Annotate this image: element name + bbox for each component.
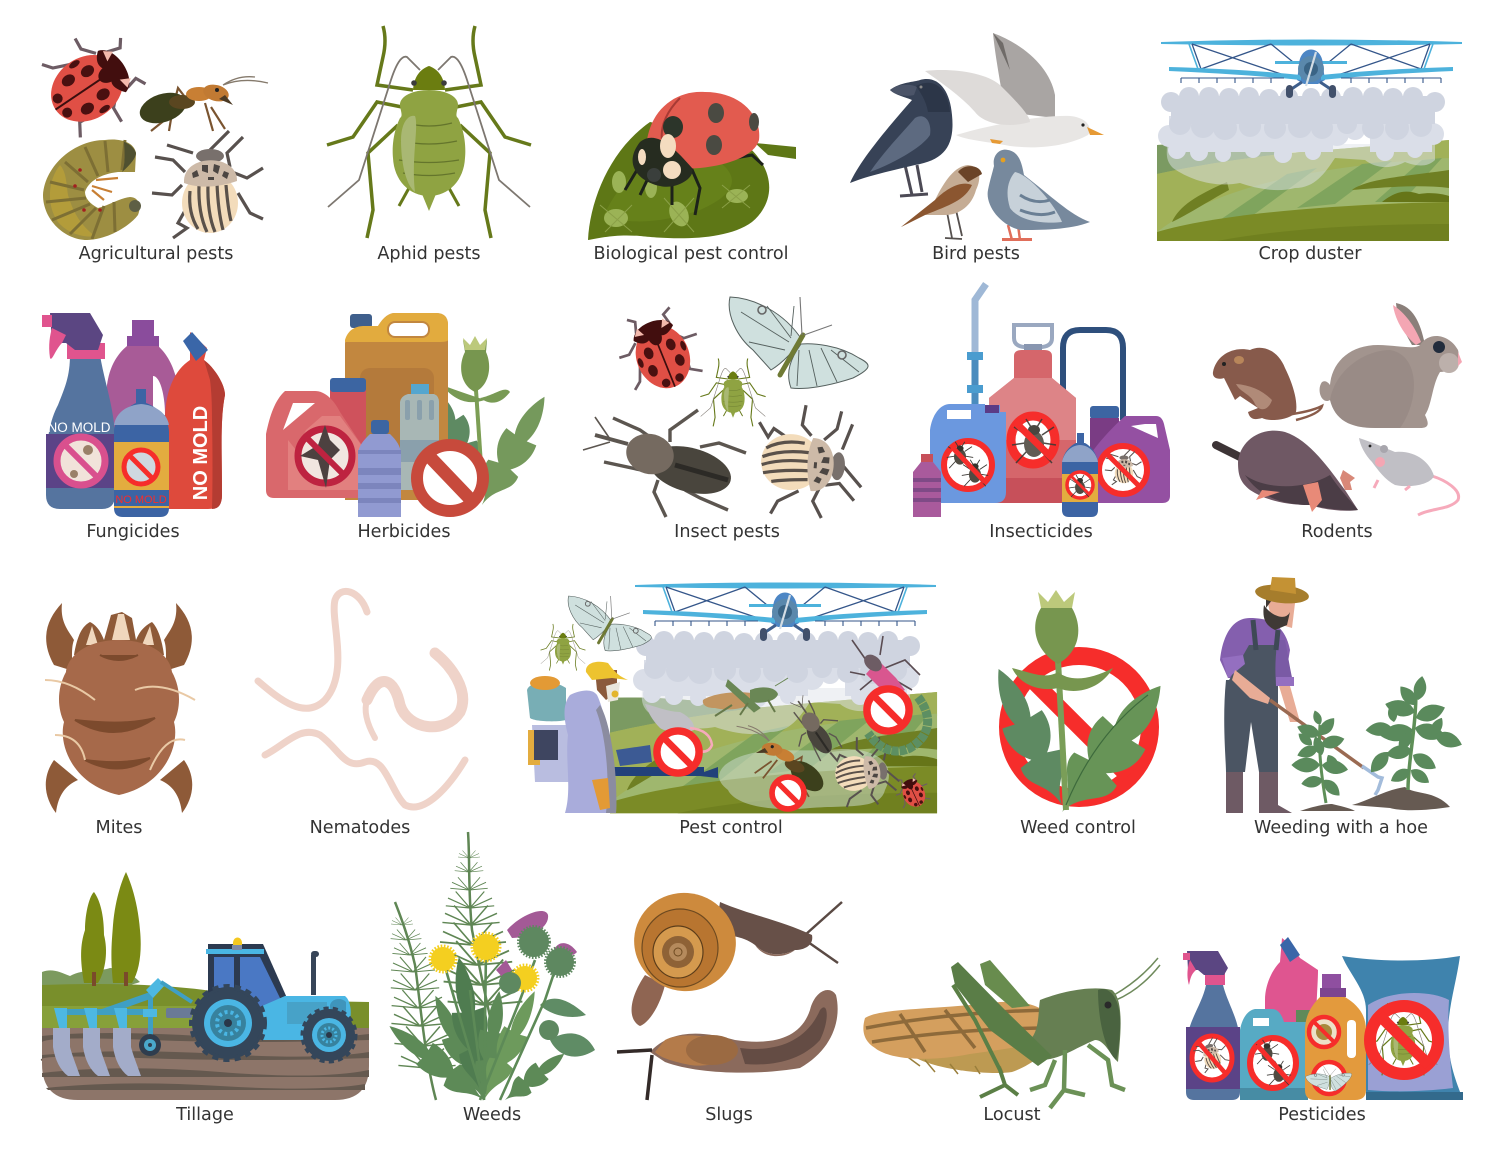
icon: horsetail stems [391,832,522,1100]
icon: blue jug [930,404,1006,503]
icon: yellow flowers [431,934,537,990]
icon: mole [1216,431,1358,512]
icon: purple jug [1090,406,1170,503]
icon: crow [850,79,953,196]
icon: blue spray bottle [1183,951,1240,1100]
panel: Tillage [41,872,369,1125]
icon: red bottle: NO MOLD [190,406,212,500]
illustration: soil [41,1028,369,1100]
icon: ladybug on leaf [625,92,763,215]
icon: biplane [635,582,936,641]
icon: pink beetle [850,636,920,692]
icon: pink bottle [1265,937,1318,1040]
caption: Herbicides [357,522,451,542]
caption: Nematodes [310,818,410,838]
caption: Agricultural pests [79,244,233,264]
caption: Crop duster [1258,244,1362,264]
icon: thistles [496,911,577,1040]
panel: Weeds [381,832,595,1125]
icon: rabbit [1320,303,1462,428]
caption: Mites [96,818,142,838]
illustration: spray cloud [633,631,920,734]
icon: purple bottle [106,320,181,500]
panel: Mites [45,603,195,838]
icon: orange jug [345,313,448,500]
panel: Slugs [617,881,842,1125]
icon: blue-purple bottle [358,420,401,517]
icon: prohibition sign [417,445,483,511]
icon: spray bottle: NO MOLD [47,420,111,435]
panel: Herbicides [266,313,560,542]
icon: moth [568,596,651,651]
icon: sparrow [901,165,982,239]
icon: leaves [381,950,595,1111]
panel: Insect pests [583,297,868,542]
icon: mouse [1359,438,1459,515]
caption: Slugs [705,1105,753,1125]
icon: spray bottle [42,313,115,509]
icon: hoe [1270,700,1382,795]
icon: plough [53,978,192,1076]
icon: worms [258,591,465,807]
icon: biplane [1161,40,1462,98]
illustration: field [610,692,937,813]
icon: sprayer tube [967,284,986,410]
icon: small aerosol bottle [1062,433,1098,517]
icon: soil mounds [1300,787,1450,811]
icon: farmer [1220,577,1310,813]
panel: Insecticides [913,284,1170,542]
icon: ladybug [607,298,712,402]
icon: red bottle [165,332,225,509]
icon: small bottle [114,389,169,517]
illustration: landscape [42,872,369,1030]
icon: tractor [192,938,355,1061]
icon: red canister [989,325,1076,503]
icon: teal jug [1240,1009,1310,1100]
panel: Agricultural pests [29,17,268,264]
panel: Rodents [1213,303,1462,542]
icon: potato beetle [829,734,901,808]
icon: aphid [327,26,531,238]
icon: weevil [583,410,746,517]
caption: Weeds [463,1105,521,1125]
icon: dandelion plant [418,336,560,514]
caption: Fungicides [86,522,180,542]
icon: grey bottle [400,384,439,490]
icon: weevil [772,690,853,768]
icon: aphid [541,624,585,671]
icon: orange bottle [1305,974,1366,1101]
icon: pigeon [988,150,1090,241]
caption: Insecticides [989,522,1093,542]
icon: caterpillar [868,697,928,751]
panel: Aphid pests [327,26,531,264]
icon: prohibition ring [1008,656,1150,798]
icon: snail [623,881,842,1026]
icon: worker with sprayer [527,662,718,813]
caption: Biological pest control [593,244,789,264]
icon: slug [617,990,838,1100]
caption: Weeding with a hoe [1254,818,1428,838]
icon: small aphids on leaf [600,171,750,232]
caption: Rodents [1301,522,1373,542]
icon: vole [1213,348,1322,420]
icon: ladybug [29,17,160,149]
caption: Pesticides [1278,1105,1366,1125]
panel: Biological pest control [588,92,796,264]
icon: small bottle: NO MOLD [115,494,167,506]
icon: grub [43,140,141,240]
icon: sprayer handle [1063,330,1123,420]
panel: Pesticides [1183,937,1463,1125]
caption: Weed control [1020,818,1136,838]
icon: ladybug [890,769,934,813]
icon: potato beetle [152,131,263,238]
icon: gull [925,33,1104,147]
icon: large tomato plant [1365,675,1464,790]
icon: ant [722,722,836,801]
icon: aphid [700,359,766,426]
panel: Nematodes [258,591,465,838]
sign: ant prohibited [771,776,805,810]
icon: locust [703,678,788,716]
illustration: field [1157,140,1449,241]
panel: Locust [863,958,1160,1125]
illustration: ground spray cloud [719,749,889,809]
caption: Aphid pests [377,244,481,264]
caption: Pest control [679,818,783,838]
icon: locust [863,958,1160,1108]
icon: red jug [266,378,366,498]
panel: Fungicides [42,313,225,542]
icon: small tomato plant [1291,709,1349,803]
caption: Insect pests [674,522,780,542]
icon: leaf [588,122,796,240]
icon: ant [136,77,268,131]
sign: mouse prohibited [656,730,700,774]
caption: Tillage [175,1105,234,1125]
caption: Locust [983,1105,1041,1125]
panel: Weed control [978,590,1183,838]
icon: small purple bottle [913,454,941,517]
panel: Weeding with a hoe [1220,577,1464,838]
caption: Bird pests [932,244,1020,264]
panel: Crop duster [1157,40,1462,264]
icon: mite [45,603,195,813]
panel: Pest control [527,582,937,838]
illustration: spray cloud [1158,87,1445,190]
sign: beetle prohibited [865,687,911,733]
icon: moth [729,297,868,389]
icon: pesticide bag [1342,956,1463,1100]
icon: mouse [645,704,712,752]
panel: Bird pests [850,33,1104,264]
icon: potato beetle [752,401,868,521]
icon: dandelion plant [978,590,1183,829]
